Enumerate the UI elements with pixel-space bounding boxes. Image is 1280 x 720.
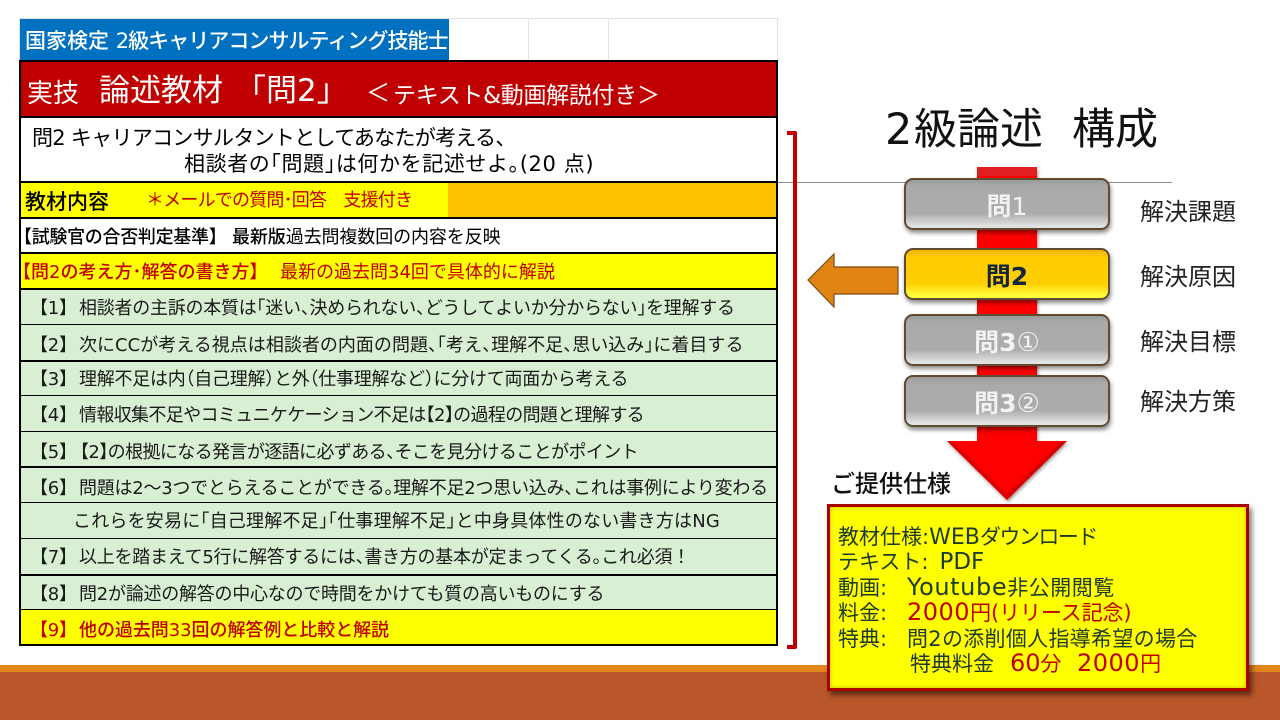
step: Q2 bbox=[904, 248, 1110, 300]
item 3: 理解不足は内（自己理解）と外（仕事理解など）に分けて両面から考える bbox=[79, 369, 628, 390]
header tab: qualification name: 国家検定 2級キャリアコンサルティング技能士 bbox=[25, 29, 448, 53]
item 5: 【2】の根拠になる発言が逐語に必ずある、そこを見分けることがポイント bbox=[80, 442, 638, 463]
footer band bbox=[0, 665, 1280, 720]
item 9 bbox=[19, 609, 778, 646]
arrow: left pointer bbox=[807, 252, 899, 308]
horizontal title rule bbox=[778, 182, 1172, 183]
label: Q3-2: 解決方策 bbox=[1140, 388, 1236, 416]
specification panel: Youtube非公開閲覧 bbox=[907, 573, 1115, 601]
spec line: bonus fee: 特典料金 bbox=[910, 652, 994, 676]
step: Q1 bbox=[904, 178, 1110, 230]
examiner criteria row bbox=[19, 217, 778, 252]
item 1: 【1】 bbox=[39, 298, 68, 319]
item 6: 【6】 bbox=[39, 478, 68, 499]
step: Q2: 問2 bbox=[986, 262, 1028, 291]
step: Q1: 問1 bbox=[987, 192, 1027, 221]
specification panel: 2000円 bbox=[1077, 649, 1161, 677]
spec line: material: 教材仕様:WEBダウンロード bbox=[838, 525, 1097, 550]
item 7 bbox=[19, 538, 778, 574]
item 2: 【2】 bbox=[39, 335, 68, 356]
step: Q3-1 bbox=[904, 314, 1110, 366]
title row: 論述教材 bbox=[99, 73, 223, 109]
item 6 bbox=[19, 466, 778, 502]
item 2 bbox=[19, 324, 778, 360]
item 8 bbox=[19, 574, 778, 609]
title row: 「問2」 bbox=[235, 73, 348, 109]
title row: テキスト&動画解説付き＞ bbox=[393, 83, 660, 109]
spec line: price bbox=[838, 598, 1132, 626]
examiner criteria row: 最新版過去問複数回の内容を反映 bbox=[232, 227, 501, 248]
item 9: 他の過去問33回の解答例と比較と解説 bbox=[79, 620, 389, 641]
how-to heading row: 【問2の考え方･解答の書き方】 bbox=[22, 262, 258, 283]
contents heading row: ＊メールでの質問･回答 支援付き bbox=[146, 190, 412, 211]
table: course contents bbox=[19, 60, 778, 646]
red down arrow bbox=[947, 167, 1068, 504]
step: Q3-2 bbox=[904, 375, 1110, 427]
step: Q3-1: 問3① bbox=[974, 328, 1040, 358]
spec line: video: 動画: bbox=[838, 576, 887, 600]
heading: composition bbox=[885, 105, 1158, 155]
specification panel: 60分 bbox=[1010, 649, 1062, 677]
heading: composition: 2 bbox=[885, 105, 912, 155]
spec line: bonus bbox=[838, 627, 1198, 651]
how-to heading row: 最新の過去問34回で具体的に解説 bbox=[280, 262, 555, 283]
item 6: 問題は2～3つでとらえることができる。理解不足2つ思い込み、これは事例により変わる bbox=[79, 478, 768, 499]
heading: specification: ご提供仕様 bbox=[831, 470, 951, 498]
title row: 実技 bbox=[27, 79, 79, 109]
spec line: price: 料金: bbox=[838, 601, 887, 625]
item 5 bbox=[19, 431, 778, 466]
contents heading row bbox=[19, 181, 778, 217]
examiner criteria row: 【試験官の合否判定基準】 bbox=[23, 227, 217, 248]
item 7: 以上を踏まえて5行に解答するには、書き方の基本が定まってくる。これ必須！ bbox=[79, 547, 690, 568]
item 8: 【8】 bbox=[39, 584, 68, 605]
specification panel bbox=[827, 504, 1249, 691]
item 8: 問2が論述の解答の中心なので時間をかけても質の高いものにする bbox=[79, 584, 604, 605]
item 1 bbox=[19, 288, 778, 324]
right bracket bbox=[787, 131, 797, 649]
item 2: 次にCCが考える視点は相談者の内面の問題、「考え、理解不足、思い込み」に着目する bbox=[79, 335, 743, 356]
specification panel: 問2の添削個人指導希望の場合 bbox=[907, 627, 1198, 651]
item 5: 【5】 bbox=[39, 442, 68, 463]
item 4 bbox=[19, 395, 778, 431]
header tab: qualification name bbox=[19, 18, 778, 60]
question row: 相談者の「問題」は何かを記述せよ。(20 点) bbox=[184, 152, 594, 176]
item 3: 【3】 bbox=[39, 369, 68, 390]
question row bbox=[19, 116, 778, 181]
item 7: 【7】 bbox=[39, 547, 68, 568]
title row bbox=[19, 60, 778, 116]
heading: composition: 構成 bbox=[1072, 105, 1158, 155]
heading: composition: 級論述 bbox=[914, 105, 1043, 155]
label: Q2: 解決原因 bbox=[1140, 263, 1236, 291]
step: Q3-2: 問3② bbox=[974, 389, 1040, 419]
item 4: 【4】 bbox=[39, 405, 68, 426]
contents heading row: 教材内容 bbox=[25, 190, 109, 214]
item 6 continued: これらを安易に「自己理解不足」「仕事理解不足」と中身具体性のない書き方はNG bbox=[73, 511, 720, 532]
spec line: video bbox=[838, 573, 1115, 601]
spec line: bonus: 特典: bbox=[838, 627, 887, 651]
item 3 bbox=[19, 360, 778, 395]
item 9: 【9】 bbox=[39, 620, 68, 641]
spec line: bonus fee bbox=[910, 649, 1161, 677]
title row: ＜ bbox=[366, 79, 390, 107]
label: Q3-1: 解決目標 bbox=[1140, 328, 1236, 356]
item 4: 情報収集不足やコミュニケケーション不足は【2】の過程の問題と理解する bbox=[79, 405, 644, 426]
item 1: 相談者の主訴の本質は「迷い、決められない、どうしてよいか分からない」を理解する bbox=[79, 298, 735, 319]
question row: 問2 キャリアコンサルタントとしてあなたが考える、 bbox=[32, 126, 505, 150]
label: Q1: 解決課題 bbox=[1140, 198, 1236, 226]
item 6 continued bbox=[19, 502, 778, 538]
how-to heading row bbox=[19, 252, 778, 289]
spec line: text: テキスト: PDF bbox=[838, 549, 984, 575]
specification panel: 2000円(リリース記念) bbox=[907, 598, 1132, 626]
